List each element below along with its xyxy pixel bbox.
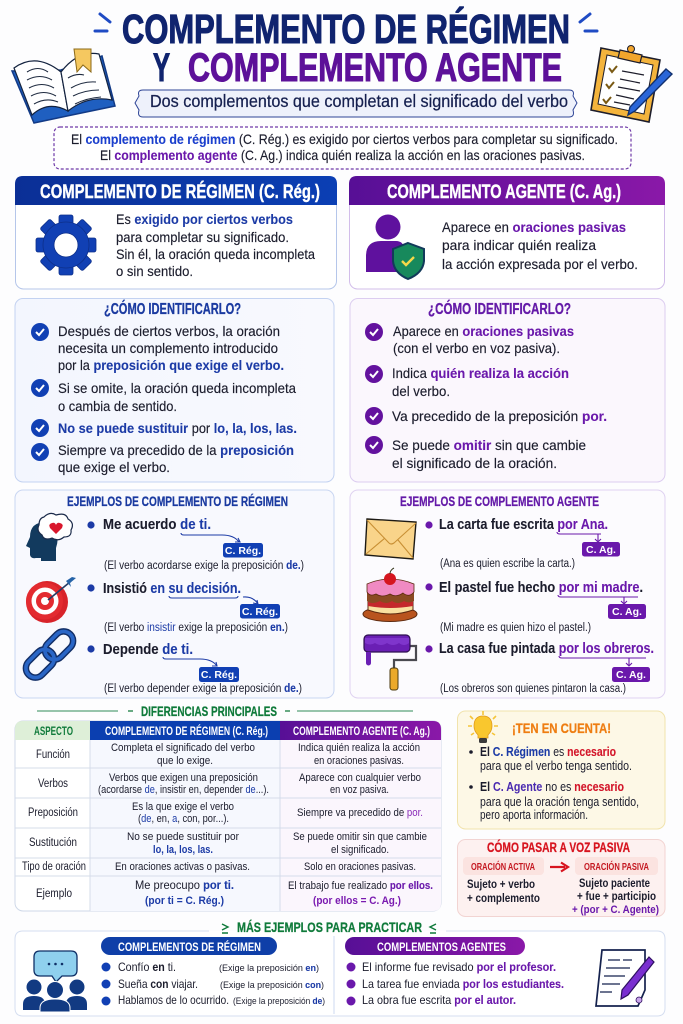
row: función: en oraciones pasivas. [314,755,404,767]
row: preposición: Es la que exige el verbo [132,801,234,813]
description: Sin él, la oración queda incompleta [116,246,315,262]
panel: más ejemplos [15,919,665,1016]
panel: ejemplos régimen [15,490,334,698]
title line 2: COMPLEMENTO AGENTE [188,46,562,90]
icon: document with pencil [596,950,654,1006]
example 1: (El verbo acordarse exige la preposición de.) [104,560,304,572]
row: preposición [28,801,423,825]
example 2: El pastel fue hecho por mi madre. [439,579,643,596]
example 1 [87,516,304,572]
checklist item 2 [365,365,569,399]
tag: C. Ag. [612,606,642,618]
panel: cómo identificarlo agente [350,298,665,482]
note 2: para que la oración tenga sentido, [480,795,639,809]
checklist item 2: del verbo. [392,383,450,399]
example 3: Depende de ti. [103,641,193,658]
checklist item 1: necesita un complemento introducido [58,340,278,356]
example 1: (Ana es quien escribe la carta.) [440,558,575,570]
formula: passive: + (por + C. Agente) [572,904,659,916]
row: tipo de oración: En oraciones activas o pasivas. [115,861,250,873]
icon: head with heart thought [26,513,72,561]
row: ejemplo: Ejemplo [36,888,72,900]
example 3 [425,640,654,695]
tag [582,542,620,556]
formula: passive: Sujeto paciente [579,878,650,890]
label: oración activa [463,857,544,875]
row: verbos: Verbos [38,778,68,790]
formula: active [467,879,540,905]
row: sustitución: el significado. [331,844,389,856]
title accent marks [95,14,597,31]
panel: ten en cuenta [458,711,665,829]
example 2 [425,579,646,634]
panel: ejemplos agente [350,490,665,698]
icon: cake [363,568,417,622]
tag: C. Ag. [616,669,646,681]
icon: group with speech bubble [23,951,87,1012]
heading: ¿CÓMO IDENTIFICARLO? [104,300,241,318]
table header: COMPLEMENTO AGENTE (C. Ag.) [293,726,430,738]
tag [608,604,646,619]
formula: passive [572,878,659,916]
tag: C. Ag. [586,544,616,556]
note 1 [469,745,632,773]
icon: gear [36,215,96,275]
label: oración activa: ORACIÓN ACTIVA [471,860,535,873]
icon: clipboard with checklist [591,46,672,122]
description: Es exigido por ciertos verbos [116,211,293,227]
row: ejemplo: El trabajo fue realizado por ellos. [288,880,433,892]
description: para indicar quién realiza [442,237,596,253]
row: sustitución [29,831,427,856]
heading: ¿CÓMO IDENTIFICARLO? [428,300,571,318]
intro box: El complemento de régimen (C. Rég.) es exigido por ciertos verbos para completar su significado. [71,131,618,147]
panel: complemento agente definition [349,176,665,289]
checklist item 4: que exige el verbo. [58,459,170,475]
checklist item 3: No se puede sustituir por lo, la, los, las. [58,420,297,436]
table header [15,721,441,740]
row: verbos: Aparece con cualquier verbo [299,772,421,784]
checklist item 2: o cambia de sentido. [58,398,177,414]
panel: cómo identificarlo régimen [15,298,334,482]
icon: person with shield [366,214,424,279]
checklist item 1: (con el verbo en voz pasiva). [393,340,560,356]
checklist item 2 [31,379,296,414]
list: ejemplos régimen: (Exige la preposición en) [219,963,319,974]
row: función [36,742,420,767]
example 3: (Los obreros son quienes pintaron la casa.) [440,683,626,695]
checklist item 1 [365,323,574,356]
row: tipo de oración: Solo en oraciones pasivas. [304,861,416,873]
description: o sin sentido. [116,263,193,279]
icon: chain links [22,627,77,682]
description [116,211,315,279]
checklist item 3: Va precedido de la preposición por. [392,408,607,424]
row: ejemplo: (por ti = C. Rég.) [145,895,224,907]
tag: C. Rég. [225,545,261,557]
row: preposición: Preposición [28,807,78,819]
table header: ASPECTO [34,726,73,738]
example 2 [87,580,288,634]
checklist item 1: por la preposición que exige el verbo. [58,357,284,373]
pill: complementos de régimen [101,937,277,955]
example 1: La carta fue escrita por Ana. [439,516,608,533]
heading: EJEMPLOS DE COMPLEMENTO AGENTE [400,494,599,509]
heading: COMPLEMENTO DE RÉGIMEN (C. Rég.) [40,180,320,203]
label: oración pasiva: ORACIÓN PASIVA [584,860,649,873]
pill: complementos agentes: COMPLEMENTOS AGENTES [377,940,506,954]
list: ejemplos régimen: Sueña con viajar. [118,977,198,991]
description: la acción expresada por el verbo. [442,256,638,272]
row: tipo de oración [22,861,416,873]
icon: light bulb [468,711,498,743]
heading: CÓMO PASAR A VOZ PASIVA [487,840,630,855]
checklist item 4: Siempre va precedido de la preposición [58,442,294,458]
note 1: El C. Régimen es necesario [480,745,616,759]
panel: cómo pasar a voz pasiva [458,840,665,916]
row: función: Indica quién realiza la acción [298,742,420,754]
row: función: Completa el significado del verbo [111,742,255,754]
note 2: El C. Agente no es necesario [480,780,624,794]
panel: complemento de régimen definition [15,176,337,289]
intro box [54,127,631,169]
list: ejemplos régimen [102,960,325,1007]
formula: active: Sujeto + verbo [467,879,535,891]
tag [612,667,650,682]
row: ejemplo: Me preocupo por ti. [135,878,234,892]
checklist item 2: Si se omite, la oración queda incompleta [58,380,296,396]
icon: envelope [365,519,416,559]
example 1 [425,516,620,570]
row: preposición: (de, en, a, con, por...). [138,813,229,825]
row: ejemplo: (por ellos = C. Ag.) [313,895,401,907]
row: verbos: en voz pasiva. [330,784,389,796]
checklist item 1 [31,323,284,373]
heading: EJEMPLOS DE COMPLEMENTO DE RÉGIMEN [67,494,288,509]
note 2 [469,780,639,822]
example 3: La casa fue pintada por los obreros. [439,640,654,657]
list: ejemplos agente: La obra fue escrita por el autor. [362,993,516,1007]
description: Aparece en oraciones pasivas [442,219,626,235]
list: ejemplos régimen: Confío en ti. [118,960,176,974]
row: verbos [38,772,421,796]
label: oración pasiva [575,857,658,875]
list: ejemplos régimen: (Exige la preposición con) [220,980,324,991]
title line 2: Y [153,46,170,90]
heading: diferencias principales: DIFERENCIAS PRINCIPALES [141,704,277,719]
example 1: Me acuerdo de ti. [103,516,211,533]
heading: ¡TEN EN CUENTA! [512,720,611,736]
checklist item 4 [31,442,294,475]
icon: open book [12,49,115,123]
list: ejemplos régimen: (Exige la preposición de) [233,996,325,1007]
arrow [550,862,568,872]
row: sustitución: No se puede sustituir por [127,831,239,843]
checklist item 2: Indica quién realiza la acción [392,365,569,381]
title [122,6,570,90]
example 3 [87,641,302,695]
icon: target with arrow [26,577,76,623]
row: función: que lo exige. [157,755,213,767]
checklist item 1: Después de ciertos verbos, la oración [58,323,280,339]
intro box: El complemento agente (C. Ag.) indica quién realiza la acción en las oraciones pasivas. [100,147,585,163]
row: ejemplo [36,878,433,907]
heading: MÁS EJEMPLOS PARA PRACTICAR [237,919,422,935]
table header: COMPLEMENTO DE RÉGIMEN (C. Rég.) [105,725,268,738]
row: verbos: Verbos que exigen una preposición [109,772,258,784]
row: preposición: Siempre va precedido de por. [297,807,423,819]
row: sustitución: lo, la, los, las. [153,844,213,856]
example 2: (El verbo insistir exige la preposición en.) [104,622,288,634]
formula: passive: + fue + participio [577,891,656,903]
description: para completar su significado. [116,229,289,245]
list: ejemplos régimen: Hablamos de lo ocurrido. [118,993,229,1007]
example 3: (El verbo depender exige la preposición de.) [104,683,302,695]
row: verbos: (acordarse de, insistir en, depender de...). [98,784,269,796]
checklist item 1: Aparece en oraciones pasivas [393,323,574,339]
comparison table [15,721,441,911]
example 2: Insistió en su decisión. [103,580,241,597]
list: ejemplos agente: La tarea fue enviada por los estudiantes. [362,977,564,991]
note 2: pero aporta información. [480,808,588,822]
row: función: Función [36,749,70,761]
row: tipo de oración: Tipo de oración [22,861,86,873]
row: sustitución: Sustitución [29,837,77,849]
formula: active: + complemento [467,893,540,905]
tag: C. Rég. [201,669,237,681]
list: ejemplos agente: El informe fue revisado por el profesor. [362,960,556,974]
checklist item 4: Se puede omitir sin que cambie [392,437,586,453]
description [442,219,638,272]
row: sustitución: Se puede omitir sin que cambie [293,831,427,843]
checklist item 4 [365,436,586,471]
list: ejemplos agente [346,960,564,1007]
example 2: (Mi madre es quien hizo el pastel.) [440,622,591,634]
tag: C. Rég. [242,606,278,618]
icon: paint roller [364,635,416,690]
pill: complementos de régimen: COMPLEMENTOS DE RÉGIMEN [118,939,261,954]
note 1: para que el verbo tenga sentido. [480,759,632,773]
subtitle banner [135,90,577,117]
checklist item 4: el significado de la oración. [392,455,557,471]
subtitle banner: Dos complementos que completan el significado del verbo [150,91,568,111]
pill: complementos agentes [345,937,525,955]
